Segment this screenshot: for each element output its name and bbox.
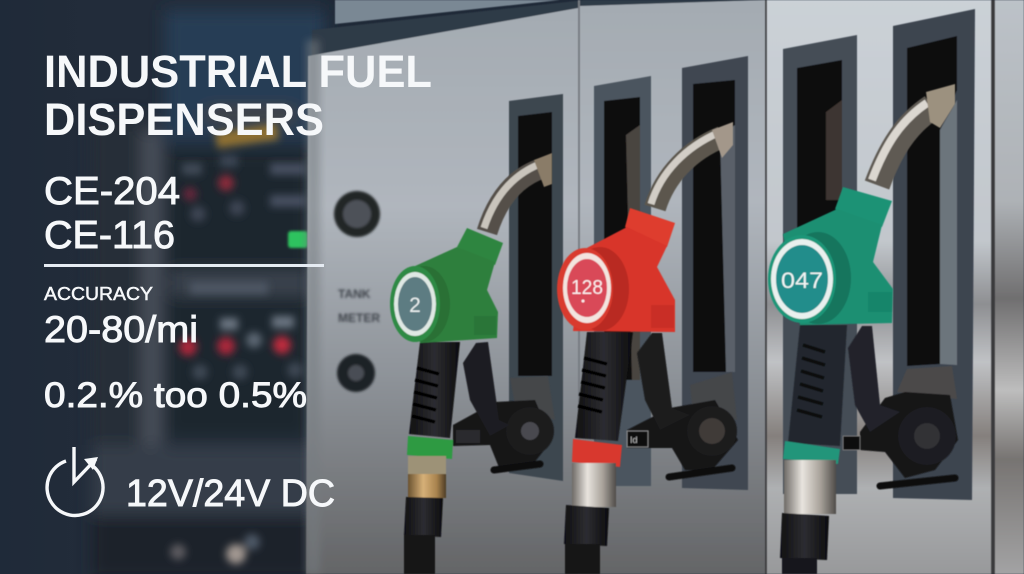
flow rate value: 20-80/mi <box>44 309 198 350</box>
slot frames <box>509 9 975 500</box>
panel: steel door 4 <box>995 0 1024 574</box>
holster <box>843 366 958 486</box>
slot 1 <box>509 94 563 481</box>
handle <box>575 332 633 441</box>
title: INDUSTRIAL FUEL <box>44 46 432 97</box>
panel: steel door 3 <box>767 0 991 574</box>
blurred control cabinet background <box>0 0 325 574</box>
dial face: 2 <box>409 294 421 317</box>
trigger <box>637 333 690 430</box>
slot 4 <box>783 35 857 494</box>
voltage value: 12V/24V DC <box>126 473 335 515</box>
dial face: 047 <box>781 268 823 293</box>
silver coupling <box>572 463 616 507</box>
model numbers: CE-204 <box>44 170 180 213</box>
model numbers: CE-116 <box>44 214 175 257</box>
slot 5 <box>893 9 975 500</box>
dial face <box>768 235 836 323</box>
icon: panel dial upper <box>334 191 380 237</box>
head body <box>413 247 498 343</box>
handle <box>788 325 847 446</box>
panel label text (blurred) <box>338 287 380 325</box>
hose tube <box>484 153 552 232</box>
holster: Id <box>630 435 638 445</box>
head body <box>783 209 893 325</box>
silver coupling <box>784 460 836 514</box>
holster <box>453 376 555 470</box>
green ring <box>407 436 453 459</box>
title <box>44 46 432 145</box>
handle <box>409 342 460 438</box>
brass coupling <box>408 456 446 498</box>
black ferrule <box>780 513 829 560</box>
teal ring <box>783 441 840 464</box>
dial face <box>390 266 440 342</box>
hose tube <box>872 84 955 185</box>
icon: power <box>47 447 103 515</box>
panel label text (blurred): TANK <box>338 287 371 301</box>
black ferrule <box>404 497 443 537</box>
divider <box>44 264 324 267</box>
collar <box>625 208 675 247</box>
hose tube <box>651 122 733 208</box>
title: DISPENSERS <box>44 94 324 145</box>
nozzle 1: green <box>390 153 555 574</box>
model numbers <box>44 170 180 257</box>
dispenser steel wall <box>306 0 1024 574</box>
head body <box>573 227 675 332</box>
trigger <box>463 342 510 436</box>
panel label text (blurred): METER <box>338 311 380 325</box>
panel: steel door 1 <box>306 8 578 574</box>
panel: steel door 2 <box>580 0 765 574</box>
dial face: 128 <box>571 277 603 299</box>
slot 2 <box>594 76 651 486</box>
slot 3 <box>682 56 748 490</box>
dial face <box>557 248 613 330</box>
trigger <box>848 326 900 432</box>
nozzle 3: teal <box>768 84 958 574</box>
collar <box>835 187 892 227</box>
icon: panel dial lower <box>337 354 375 392</box>
black ferrule <box>564 505 609 546</box>
accuracy label: ACCURACY <box>44 284 153 304</box>
holster <box>627 372 738 477</box>
accuracy value: 0.2.% too 0.5% <box>44 376 307 415</box>
nozzle 2: red <box>557 122 738 574</box>
collar <box>457 228 503 265</box>
red ring <box>572 439 622 467</box>
